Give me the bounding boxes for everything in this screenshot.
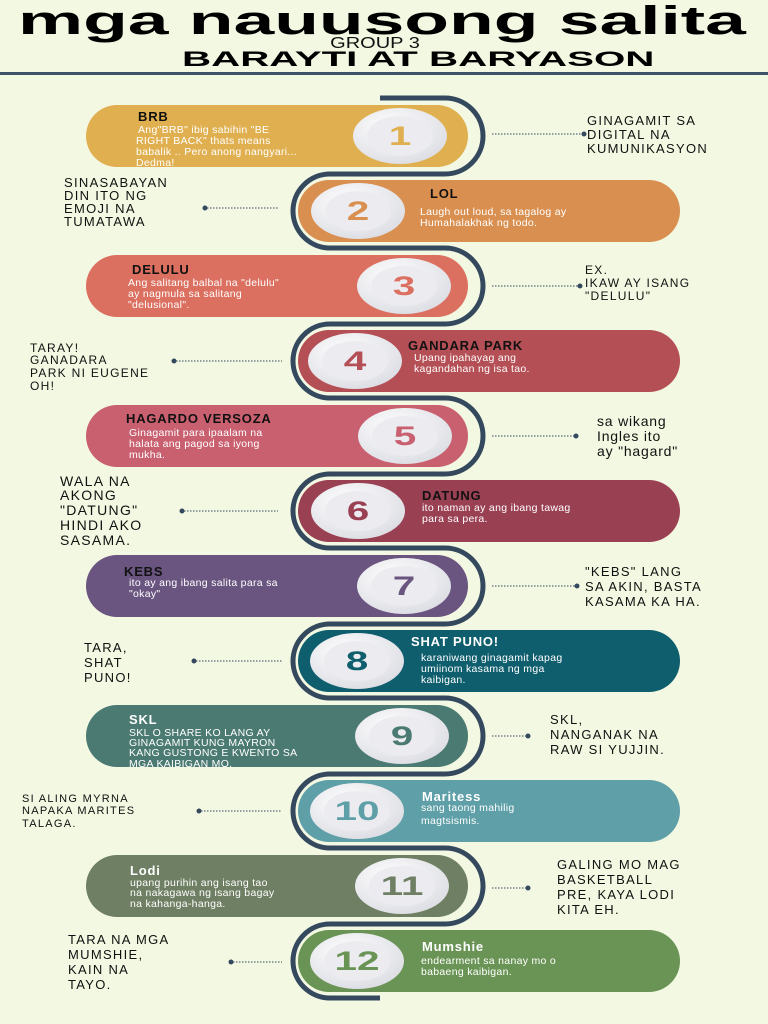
note 8: SHAT <box>84 655 123 670</box>
note 11: KITA EH. <box>557 902 620 917</box>
note 6: AKONG <box>60 487 117 503</box>
note 11: PRE, KAYA LODI <box>557 887 675 902</box>
note 11: BASKETBALL <box>557 872 653 887</box>
note 6 <box>60 473 278 548</box>
note 5: sa wikang <box>597 413 666 429</box>
note 4: PARK NI EUGENE <box>30 366 149 380</box>
row 3: DELULU: DELULU <box>132 262 190 277</box>
row 8: SHAT PUNO: karaniwang ginagamit kapag <box>421 652 562 664</box>
row 11: Lodi: Lodi <box>130 863 161 878</box>
note 10: NAPAKA MARITES <box>22 805 135 817</box>
note 5: Ingles ito <box>597 428 661 444</box>
note 4: GANADARA <box>30 353 108 367</box>
row 2: LOL: Humahalakhak ng todo. <box>420 217 537 229</box>
row 1: BRB: 1 <box>389 121 411 151</box>
row 7: KEBS: "okay" <box>129 588 160 600</box>
note 6: HINDI AKO <box>60 517 142 533</box>
note 7: KASAMA KA HA. <box>585 594 701 609</box>
note 10: SI ALING MYRNA <box>22 793 129 805</box>
note 3 <box>492 263 690 303</box>
row 8: SHAT PUNO: kaibigan. <box>421 674 466 686</box>
note 7: "KEBS" LANG <box>585 564 682 579</box>
row 4: GANDARA PARK: GANDARA PARK <box>408 338 523 353</box>
note 3: "DELULU" <box>585 289 651 303</box>
row 9: SKL: 9 <box>391 721 413 751</box>
row 10: Maritess: magtsismis. <box>421 815 480 827</box>
row 12: Mumshie: endearment sa nanay mo o <box>421 955 556 967</box>
note 1: GINAGAMIT SA <box>587 113 696 128</box>
row 8: SHAT PUNO: umiinom kasama ng mga <box>421 663 545 675</box>
note 4 <box>30 341 282 393</box>
row 11: Lodi <box>86 855 468 917</box>
row 12: Mumshie <box>298 930 680 992</box>
row 11: Lodi: upang purihin ang isang tao <box>130 877 268 889</box>
row 4: GANDARA PARK: Upang ipahayag ang <box>414 352 516 364</box>
row 5: HAGARDO VERSOZA: halata ang pagod sa iyong <box>129 438 260 450</box>
row 9: SKL: MGA KAIBIGAN MO. <box>129 758 232 770</box>
note 1: DIGITAL NA <box>587 127 671 142</box>
note 12: MUMSHIE, <box>68 947 143 962</box>
note 12: TARA NA MGA <box>68 932 169 947</box>
row 3: DELULU <box>86 255 468 317</box>
note 8: PUNO! <box>84 670 132 685</box>
row 10: Maritess: Maritess <box>422 789 481 804</box>
note 9: NANGANAK NA <box>550 727 659 742</box>
note 2 <box>64 175 278 229</box>
row 9: SKL: KANG GUSTONG E KWENTO SA <box>129 747 297 759</box>
note 1 <box>492 113 708 156</box>
note 3: IKAW AY ISANG <box>585 276 690 290</box>
row 2: LOL: 2 <box>347 196 369 226</box>
row 7: KEBS: 7 <box>393 571 415 601</box>
subtitle: barayti: BARAYTI AT BARYASON <box>182 47 654 71</box>
note 6: SASAMA. <box>60 532 131 548</box>
row 12: Mumshie: Mumshie <box>422 939 484 954</box>
row 12: Mumshie: babaeng kaibigan. <box>421 966 512 978</box>
row 3: DELULU: Ang salitang balbal na "delulu" <box>128 277 279 289</box>
note 8: TARA, <box>84 640 128 655</box>
row 2: LOL: LOL <box>430 186 458 201</box>
row 6: DATUNG: para sa pera. <box>422 513 488 525</box>
row 1: BRB: Dedma! <box>136 157 175 169</box>
row 11: Lodi: na nakagawa ng isang bagay <box>130 887 275 899</box>
note 2: TUMATAWA <box>64 214 146 229</box>
note 1: KUMUNIKASYON <box>587 141 708 156</box>
row 9: SKL: GINAGAMIT KUNG MAYRON <box>129 737 276 749</box>
row 2: LOL <box>298 180 680 242</box>
row 11: Lodi: na kahanga-hanga. <box>130 898 226 910</box>
row 3: DELULU: ay nagmula sa salitang <box>128 288 242 300</box>
note 2: EMOJI NA <box>64 201 136 216</box>
row 6: DATUNG: DATUNG <box>422 488 481 503</box>
title <box>18 0 747 71</box>
row 2: LOL: Laugh out loud, sa tagalog ay <box>420 206 567 218</box>
note 10: TALAGA. <box>22 818 77 830</box>
serpentine line <box>293 98 483 998</box>
row 8: SHAT PUNO <box>298 630 680 692</box>
row 7: KEBS <box>86 555 468 617</box>
row 5: HAGARDO VERSOZA: HAGARDO VERSOZA <box>126 411 272 426</box>
row 3: DELULU: 3 <box>393 271 415 301</box>
row 1: BRB: babalik .. Pero anong nangyari... <box>136 146 297 158</box>
note 9 <box>492 712 665 757</box>
row 7: KEBS: ito ay ang ibang salita para sa <box>129 577 278 589</box>
row 1: BRB: Ang"BRB" ibig sabihin "BE <box>138 124 269 136</box>
row 1: BRB: BRB <box>138 109 169 124</box>
note 12: KAIN NA <box>68 962 129 977</box>
row 10: Maritess <box>298 780 680 842</box>
note 3: EX. <box>585 263 608 277</box>
row 5: HAGARDO VERSOZA: 5 <box>394 421 416 451</box>
row 7: KEBS: KEBS <box>124 564 163 579</box>
row 1: BRB: RIGHT BACK" thats means <box>136 135 271 147</box>
row 1: BRB <box>86 105 468 169</box>
row 10: Maritess: 10 <box>334 796 380 826</box>
note 5 <box>492 413 678 459</box>
note 2: SINASABAYAN <box>64 175 168 190</box>
row 9: SKL <box>86 705 468 770</box>
note 12 <box>68 932 282 992</box>
row 5: HAGARDO VERSOZA <box>86 405 468 467</box>
row 8: SHAT PUNO: 8 <box>346 646 368 676</box>
note 8 <box>84 640 282 685</box>
note 6: WALA NA <box>60 473 131 489</box>
subtitle: group: GROUP 3 <box>330 34 420 52</box>
title: mga nauusong salita <box>18 0 747 43</box>
note 12: TAYO. <box>68 977 112 992</box>
row 6: DATUNG: 6 <box>347 496 369 526</box>
row 8: SHAT PUNO: SHAT PUNO! <box>411 634 499 649</box>
row 11: Lodi: 11 <box>381 871 423 901</box>
note 7: SA AKIN, BASTA <box>585 579 702 594</box>
note 4: OH! <box>30 379 55 393</box>
row 5: HAGARDO VERSOZA: mukha. <box>129 449 165 461</box>
note 7 <box>492 564 702 609</box>
row 3: DELULU: "delusional". <box>128 299 190 311</box>
note 11: GALING MO MAG <box>557 857 681 872</box>
note 6: "DATUNG" <box>60 502 138 518</box>
note 9: RAW SI YUJJIN. <box>550 742 665 757</box>
note 4: TARAY! <box>30 341 79 355</box>
note 11 <box>492 857 681 917</box>
note 9: SKL, <box>550 712 583 727</box>
note 10 <box>22 793 282 830</box>
row 5: HAGARDO VERSOZA: Ginagamit para ipaalam na <box>129 427 263 439</box>
row 9: SKL: SKL <box>129 712 157 727</box>
row 9: SKL: SKL O SHARE KO LANG AY <box>129 727 270 739</box>
row 4: GANDARA PARK: kagandahan ng isa tao. <box>414 363 530 375</box>
row 6: DATUNG <box>298 480 680 542</box>
row 4: GANDARA PARK <box>298 330 680 392</box>
row 4: GANDARA PARK: 4 <box>344 346 366 376</box>
row 6: DATUNG: ito naman ay ang ibang tawag <box>422 502 570 514</box>
row 10: Maritess: sang taong mahilig <box>421 802 515 814</box>
row 12: Mumshie: 12 <box>334 946 380 976</box>
note 5: ay "hagard" <box>597 443 678 459</box>
note 2: DIN ITO NG <box>64 188 148 203</box>
